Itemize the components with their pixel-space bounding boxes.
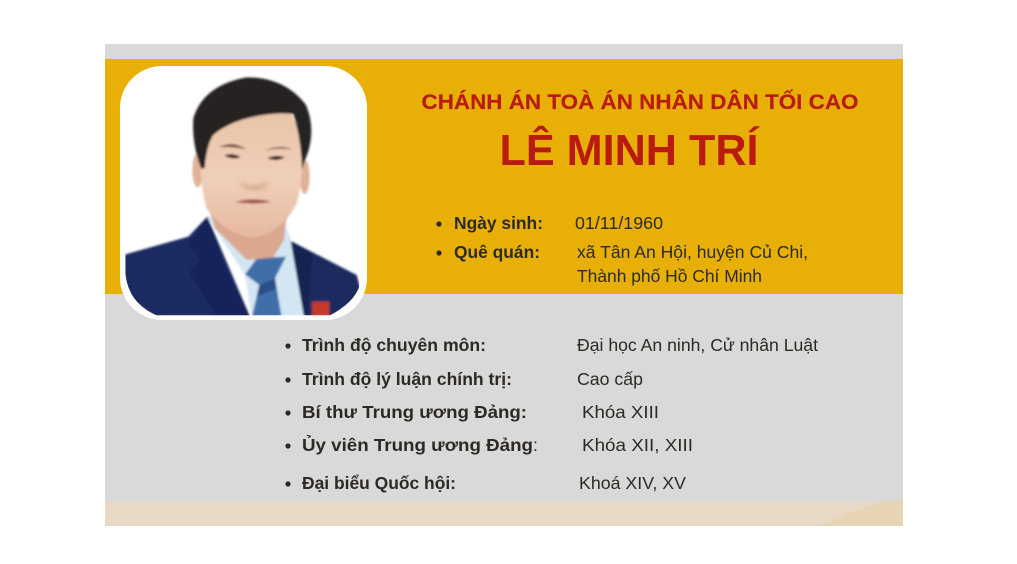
text block: career details: Trình độ lý luận chính trị: xyxy=(302,369,512,389)
page background panel xyxy=(105,44,903,526)
text block: career details: Cao cấp xyxy=(577,369,643,389)
icon: nose shadow xyxy=(240,182,268,189)
text block: personal details: Quê quán: xyxy=(454,242,540,262)
icon: face xyxy=(200,110,302,237)
text block: career details: Ủy viên Trung ương Đảng xyxy=(302,434,533,455)
icon: necktie knot shadow xyxy=(257,278,277,297)
icon: eyebrows xyxy=(219,144,293,151)
text block: career details: Khóa XII, XIII xyxy=(582,435,693,455)
icon: shirt xyxy=(207,217,304,317)
icon: suit lapel left xyxy=(202,221,249,315)
text block: career details: Đại biểu Quốc hội: xyxy=(302,473,456,493)
icon: necktie xyxy=(245,257,286,317)
icon: neck xyxy=(209,208,287,260)
text block: personal details: 01/11/1960 xyxy=(575,213,663,233)
heading: name: LÊ MINH TRÍ xyxy=(500,125,760,175)
text block: personal details: Thành phố Hồ Chí Minh xyxy=(577,266,762,286)
text block: career details: : xyxy=(533,435,538,455)
text block: career details: Khóa XIII xyxy=(582,402,659,422)
portrait photo xyxy=(120,66,367,320)
icon: suit lapel right xyxy=(291,241,312,317)
text block: personal details: xã Tân An Hội, huyện Củ Chi, xyxy=(577,242,808,262)
icon: mouth xyxy=(235,199,272,204)
text block: career details: Bí thư Trung ương Đảng: xyxy=(302,402,527,422)
panel: beige footer strip xyxy=(105,501,903,526)
heading: position title: CHÁNH ÁN TOÀ ÁN NHÂN DÂN TỐI CAO xyxy=(422,88,858,114)
text block: career details: Trình độ chuyên môn: xyxy=(302,335,486,355)
text block: personal details: Ngày sinh: xyxy=(454,213,543,233)
icon: eyes xyxy=(224,154,285,160)
icon: hair xyxy=(193,77,311,169)
panel: yellow header band xyxy=(105,59,903,294)
text block: personal details xyxy=(436,213,808,286)
text block: career details: Đại học An ninh, Cử nhân Luật xyxy=(577,335,818,355)
text block: career details: Khoá XIV, XV xyxy=(579,473,686,493)
icon: party pin xyxy=(312,302,329,317)
icon: suit jacket right xyxy=(291,241,362,317)
icon: suit jacket left xyxy=(123,217,250,317)
text block: career details xyxy=(285,335,818,493)
icon: ears xyxy=(192,153,203,187)
